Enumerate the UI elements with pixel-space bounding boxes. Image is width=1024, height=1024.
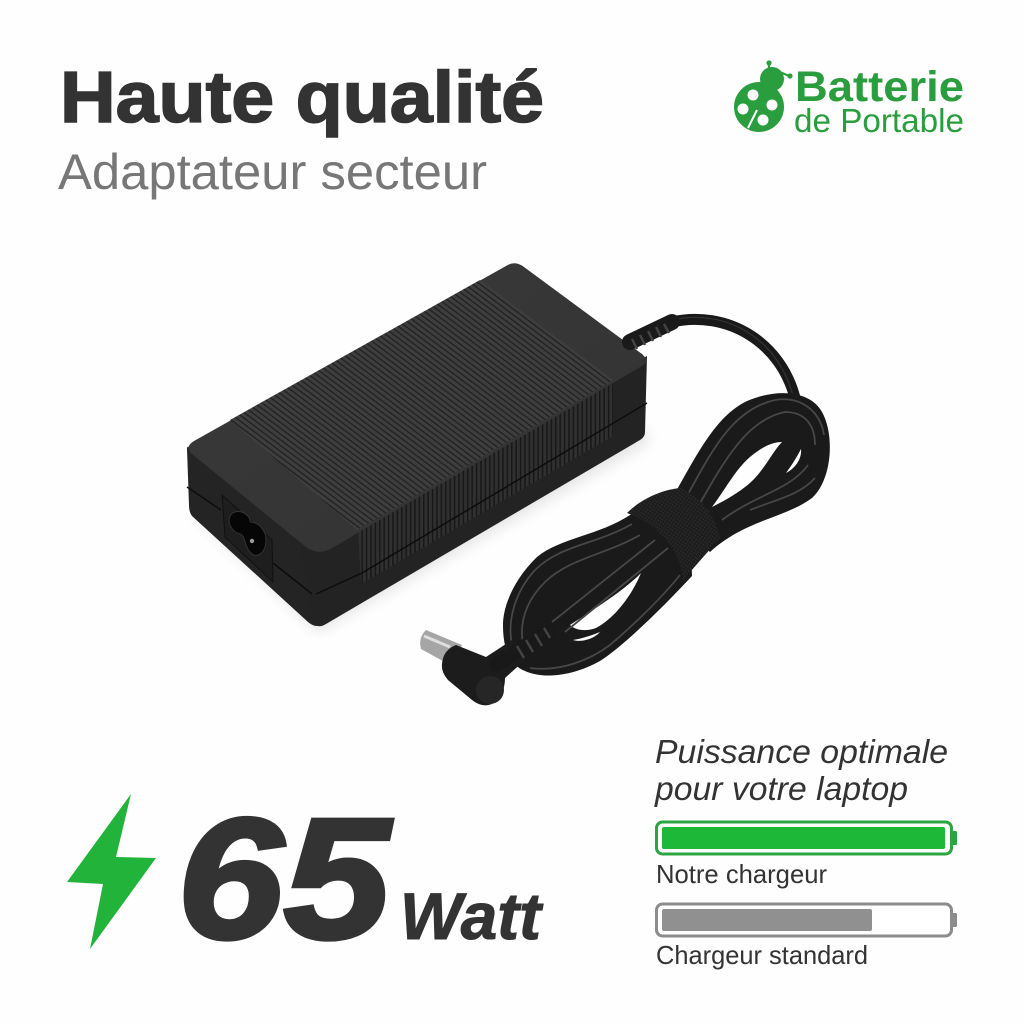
icon: lightning bolt <box>67 794 156 949</box>
ribbed side <box>358 381 613 584</box>
strain relief top <box>630 322 672 349</box>
comparison panel <box>654 733 957 970</box>
battery: our charger <box>656 822 957 854</box>
icon: ladybug <box>734 60 793 132</box>
logo wordmark top: Batterie <box>795 63 964 111</box>
front face <box>187 447 322 626</box>
metal barrel <box>420 630 462 666</box>
label: standard charger: Chargeur standard <box>656 940 868 970</box>
top face <box>188 263 646 552</box>
seam line <box>187 403 647 594</box>
plug body <box>442 640 525 705</box>
cable from adapter to bundle <box>672 317 796 402</box>
battery: standard charger <box>656 904 957 936</box>
coiled cable upper loop <box>665 393 830 552</box>
power inlet <box>222 495 273 582</box>
adapter body <box>187 263 647 626</box>
wattage number: 65 <box>177 783 393 975</box>
label: our charger: Notre chargeur <box>656 859 827 889</box>
right side face <box>300 356 647 626</box>
logo: Batterie de Portable <box>734 60 964 139</box>
subtitle: Adaptateur secteur <box>58 144 487 200</box>
title: Haute qualité <box>60 58 544 138</box>
logo wordmark bottom: de Portable <box>794 102 964 139</box>
coiled cable lower loop <box>503 505 692 676</box>
comparison heading: Puissance optimale <box>655 733 948 770</box>
strain relief connector <box>497 632 548 664</box>
ribbed top <box>230 280 613 530</box>
product: power adapter <box>187 263 830 705</box>
cable strap <box>627 488 720 580</box>
comparison heading: pour votre laptop <box>654 770 908 807</box>
right angle DC plug <box>420 628 550 705</box>
adapter shadow <box>195 425 650 632</box>
wattage unit: Watt <box>400 879 544 953</box>
